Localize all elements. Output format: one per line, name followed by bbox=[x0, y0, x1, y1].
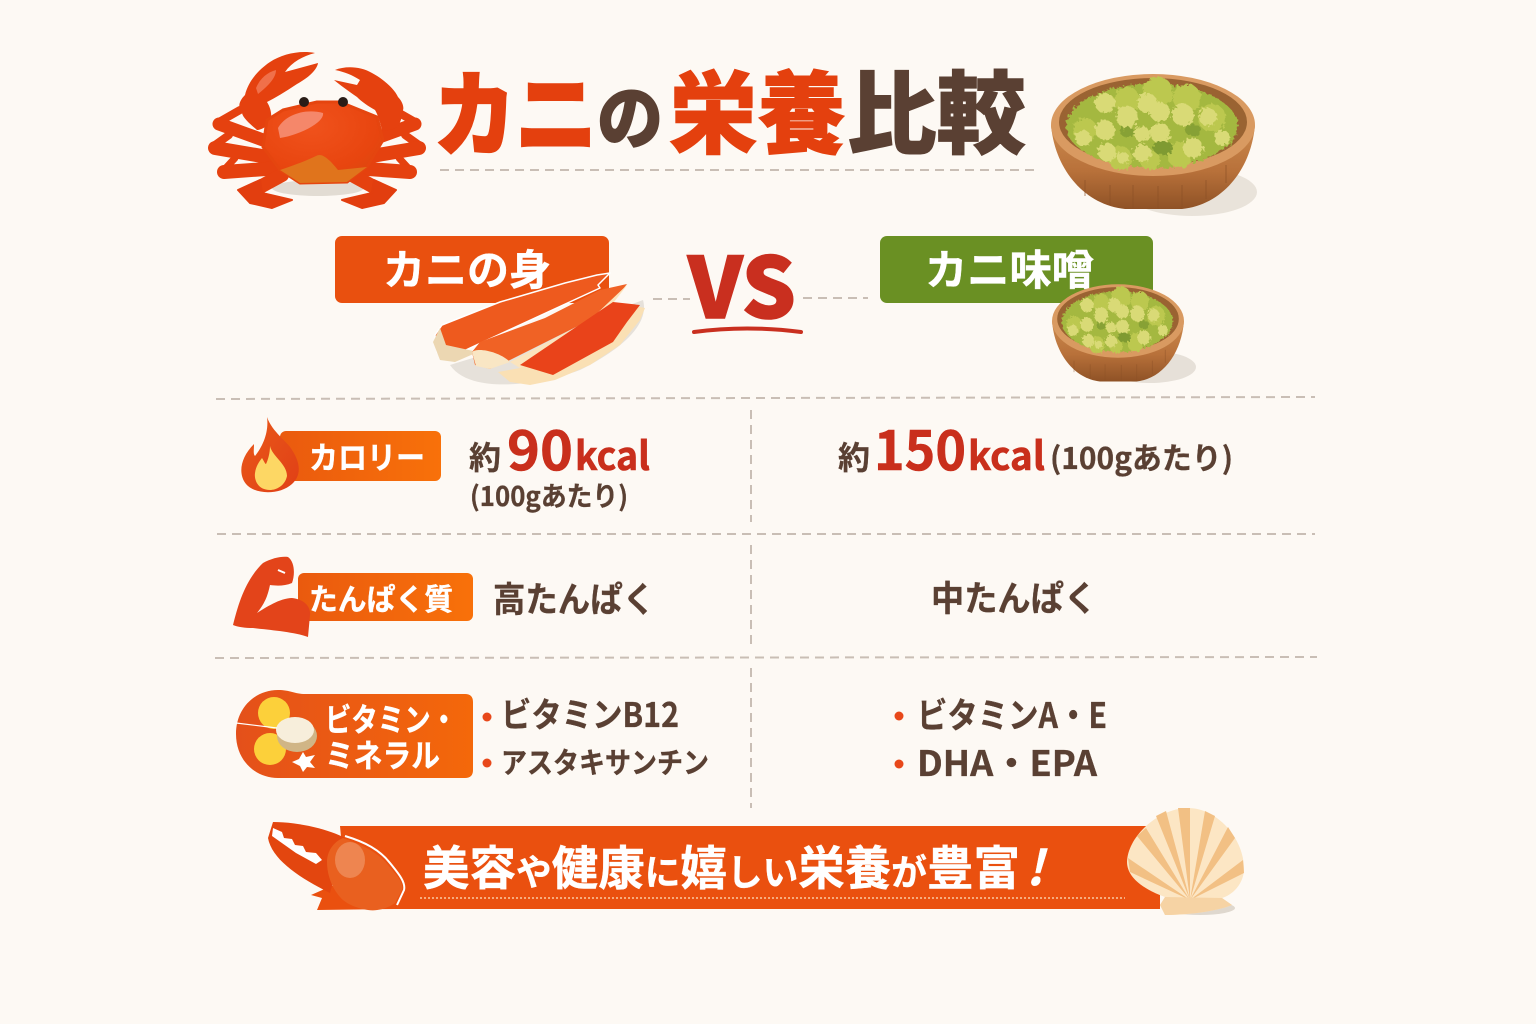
banner bbox=[268, 808, 1244, 915]
crab miso calories: kcal bbox=[968, 426, 1045, 482]
row: calories bbox=[241, 407, 1233, 514]
vitamins badge bbox=[236, 690, 473, 778]
crab miso protein: 中たんぱく bbox=[931, 571, 1097, 622]
VS label: VS bbox=[687, 222, 796, 343]
title: 比較 bbox=[847, 42, 1026, 172]
row: vitamins and minerals bbox=[236, 688, 1107, 787]
crab miso nutrients bbox=[894, 688, 1107, 787]
crab meat calories bbox=[469, 407, 650, 514]
VS label bbox=[653, 222, 868, 343]
icon: small crab miso bowl bbox=[1052, 284, 1196, 383]
crab meat nutrients: ビタミンB12 bbox=[501, 688, 679, 737]
banner text: 美容や健康に嬉しい栄養が豊富 bbox=[423, 830, 1020, 899]
crab meat calories: kcal bbox=[575, 426, 650, 482]
calories badge: カロリー bbox=[309, 433, 425, 478]
icon: crab claw bbox=[268, 822, 404, 910]
crab meat protein: 高たんぱく bbox=[493, 572, 655, 623]
icon: crab legs bbox=[433, 273, 645, 385]
crab miso nutrients: DHA・EPA bbox=[917, 736, 1098, 787]
crab miso calories bbox=[838, 407, 1233, 486]
calories badge bbox=[280, 431, 441, 481]
icon: flexed arm bbox=[233, 557, 310, 637]
icon: crab bbox=[215, 52, 419, 208]
crab meat nutrients bbox=[482, 688, 709, 782]
title bbox=[434, 42, 1026, 175]
protein badge: たんぱく質 bbox=[309, 575, 453, 619]
title: 栄養 bbox=[669, 42, 846, 172]
crab meat calories: (100gあたり) bbox=[470, 475, 628, 514]
panel: crab meat header bbox=[335, 236, 609, 303]
panel: crab miso header bbox=[880, 236, 1153, 303]
icon: scallop shell bbox=[1127, 808, 1244, 915]
crab miso calories: (100gあたり) bbox=[1050, 434, 1233, 478]
title: カニ bbox=[434, 42, 597, 175]
exclamation mark: ! bbox=[1026, 829, 1048, 899]
panel: crab meat header: カニの身 bbox=[383, 237, 551, 298]
icon: large crab miso bowl bbox=[1051, 74, 1257, 216]
title: の bbox=[597, 63, 663, 164]
icon: supplements bbox=[236, 697, 317, 772]
crab miso calories: 約 bbox=[838, 433, 870, 479]
crab meat calories: 約 bbox=[469, 433, 501, 479]
icon: flame bbox=[241, 417, 299, 492]
crab meat calories: 90 bbox=[507, 407, 573, 486]
vitamins badge: ミネラル bbox=[325, 731, 440, 777]
vitamins badge: ビタミン・ bbox=[325, 695, 457, 741]
row: protein bbox=[233, 557, 1097, 637]
panel: crab miso header: カニ味噌 bbox=[925, 237, 1094, 298]
crab miso nutrients: ビタミンA・E bbox=[917, 688, 1107, 739]
crab miso calories: 150 bbox=[874, 407, 966, 486]
crab meat nutrients: アスタキサンチン bbox=[501, 740, 709, 782]
